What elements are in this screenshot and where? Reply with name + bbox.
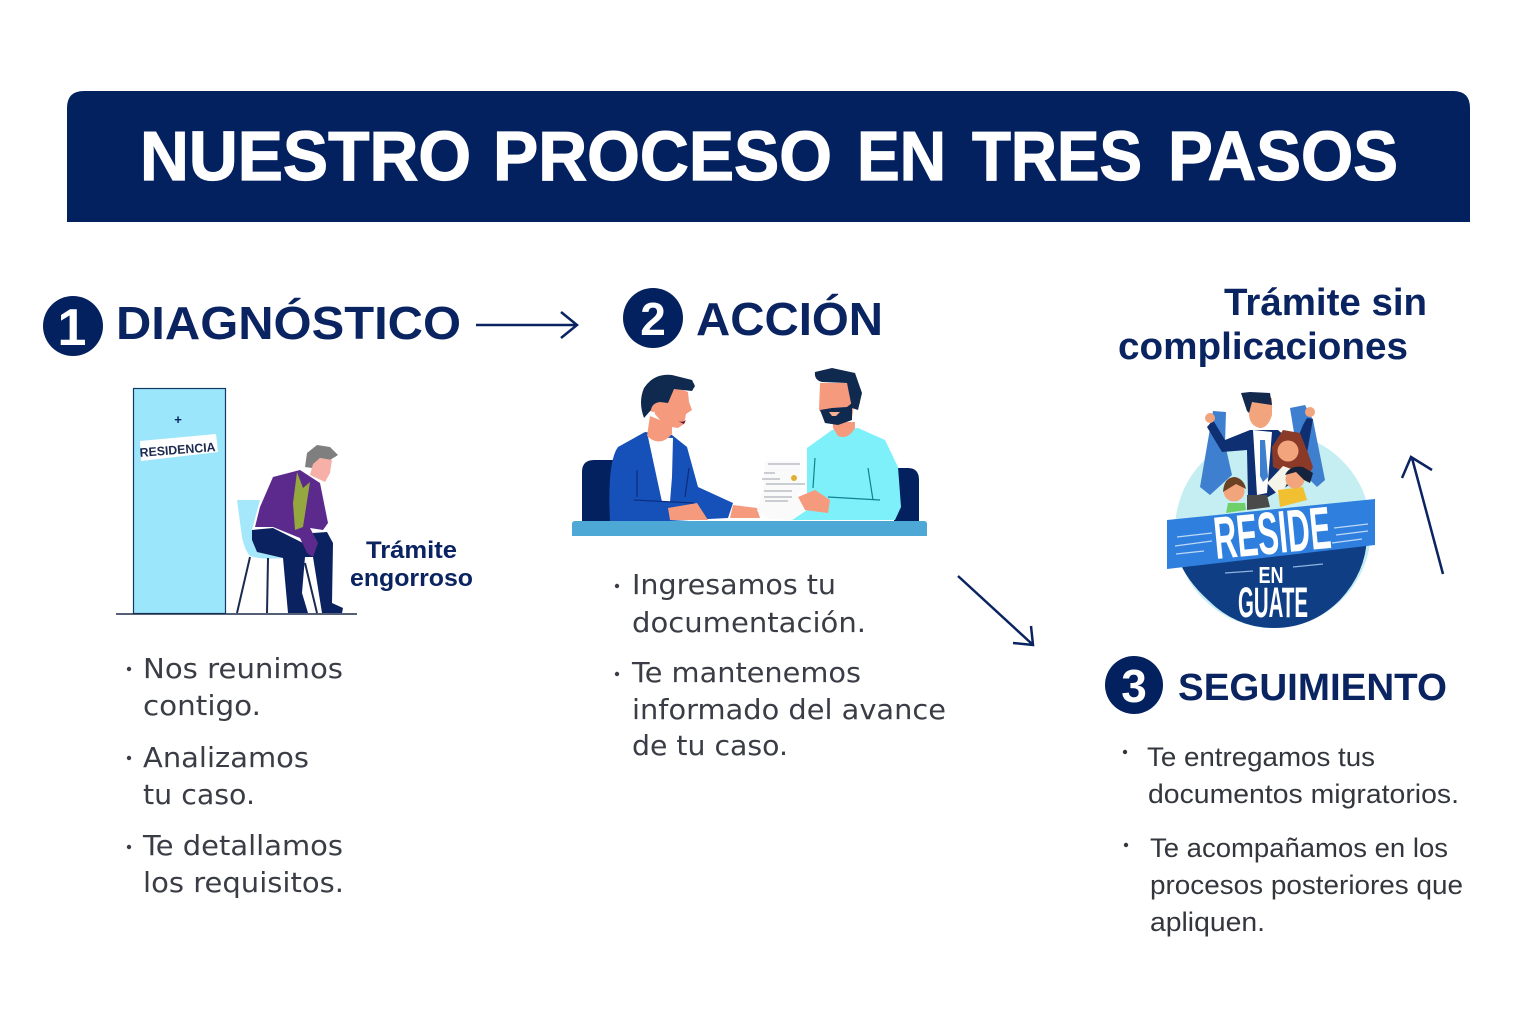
step 1 bullet list: Te detallamos (142, 829, 343, 862)
step 1 bullet list: los requisitos. (143, 866, 344, 899)
step 1 heading: 1 (58, 299, 86, 357)
trousers (252, 528, 343, 613)
girl (1278, 487, 1307, 507)
face (310, 458, 332, 482)
step 3 bullet list (1123, 742, 1463, 937)
title text: PASOS (1168, 117, 1398, 195)
label: trámite engorroso: Trámite (366, 537, 457, 564)
step 3 heading: 3 (1121, 660, 1147, 712)
step 2 bullet list (615, 568, 946, 762)
man in blue jacket (609, 375, 760, 521)
logo: reside en guate (1167, 392, 1375, 628)
title text: TRES (972, 117, 1142, 195)
step 3 bullet list: Te entregamos tus (1147, 742, 1375, 772)
door: + (174, 412, 182, 427)
step 2 bullet list: informado del avance (632, 693, 946, 726)
step 2 bullet list: Ingresamos tu (632, 568, 836, 601)
step 2 bullet list: de tu caso. (632, 729, 788, 762)
door (134, 388, 226, 614)
logo lower text (1225, 562, 1323, 627)
man head (1249, 398, 1272, 428)
illustration: man waiting at door (116, 388, 357, 614)
woman (1272, 430, 1313, 480)
step 3 bullet list: procesos posteriores que (1150, 870, 1463, 900)
document (757, 461, 805, 520)
arrow: step 2 to step 3 (958, 576, 1033, 645)
step 1 bullet list: Analizamos (143, 741, 309, 774)
boy (1224, 480, 1244, 502)
logo ribbon (1167, 494, 1375, 572)
step 1 bullet list: contigo. (143, 689, 261, 722)
logo lower text: GUATE (1238, 579, 1308, 627)
logo ribbon: RESIDE (1211, 494, 1334, 572)
step 1 heading (43, 296, 461, 357)
outcome heading: trámite sin complicaciones: Trámite sin (1224, 282, 1427, 324)
step 2 heading: 2 (640, 293, 666, 345)
illustration: two men at table (572, 368, 927, 536)
logo circle (1175, 432, 1371, 628)
tie (293, 472, 310, 530)
label: trámite engorroso (350, 537, 473, 592)
step 3 heading (1105, 656, 1447, 714)
title banner (67, 91, 1470, 222)
step 3 bullet list: Te acompañamos en los (1150, 833, 1448, 863)
jacket (255, 470, 328, 557)
title text: NUESTRO (140, 117, 471, 195)
capes (1200, 411, 1232, 495)
label: trámite engorroso: engorroso (350, 565, 473, 592)
step 1 bullet list: tu caso. (143, 778, 255, 811)
hair (305, 445, 338, 468)
door: RESIDENCIA (139, 440, 216, 460)
step 3 bullet list: apliquen. (1150, 907, 1265, 937)
family (1200, 392, 1325, 513)
outcome heading: trámite sin complicaciones: complicaciones (1118, 326, 1408, 368)
step 2 heading (623, 288, 883, 348)
title text: EN (857, 117, 946, 195)
step 1 heading: DIAGNÓSTICO (116, 297, 461, 349)
step 2 bullet list: Te mantenemos (631, 656, 861, 689)
man jacket (1207, 418, 1313, 497)
hands (1205, 413, 1215, 423)
step 2 heading: ACCIÓN (696, 293, 883, 345)
title text: PROCESO (493, 117, 832, 195)
man in cyan shirt (792, 368, 901, 520)
step 1 bullet list: Nos reunimos (143, 652, 343, 685)
step 1 bullet list (127, 652, 344, 899)
table (572, 521, 927, 536)
floor line (116, 613, 357, 615)
chairs (582, 460, 919, 521)
seated man (252, 445, 343, 613)
logo lower text: EN (1258, 562, 1284, 588)
chair (237, 500, 317, 613)
arrow: step 1 to step 2 (476, 312, 577, 338)
arrow: step 3 to result (1402, 457, 1443, 574)
step 3 bullet list: documentos migratorios. (1148, 779, 1459, 809)
step 3 heading: SEGUIMIENTO (1178, 667, 1447, 709)
outcome heading: trámite sin complicaciones (1118, 282, 1427, 368)
step 2 bullet list: documentación. (632, 606, 866, 639)
